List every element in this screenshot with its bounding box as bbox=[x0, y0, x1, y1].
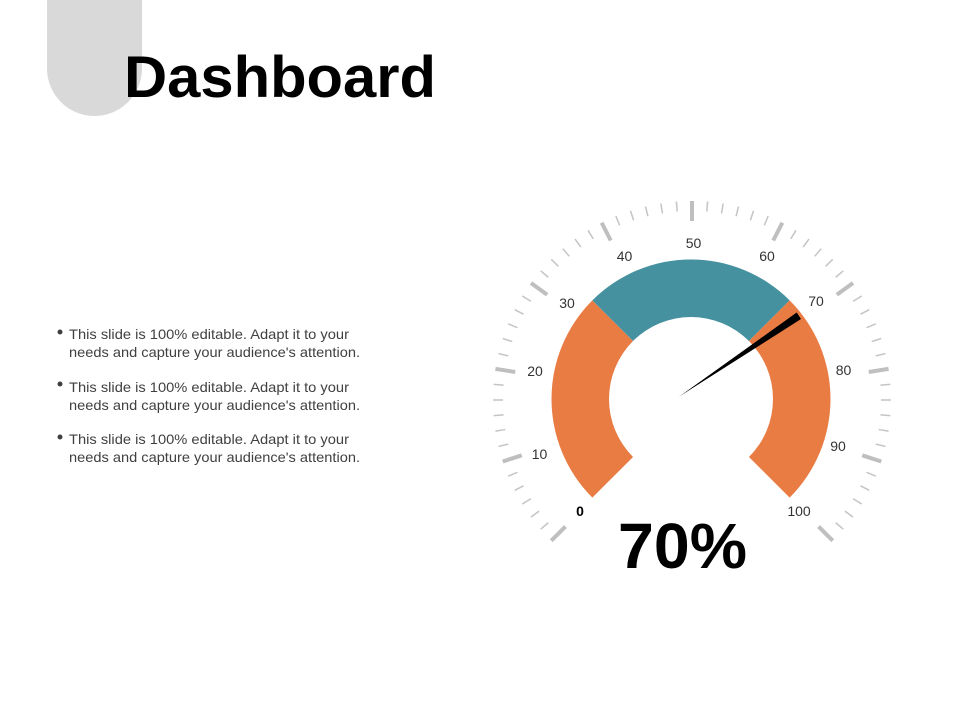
bullet list bbox=[58, 326, 360, 465]
bullet item 3: needs and capture your audience's attention. bbox=[69, 449, 360, 465]
gauge minor ticks bbox=[493, 202, 891, 529]
gauge value: 70% bbox=[618, 510, 747, 582]
bullet item 2 bbox=[58, 379, 360, 413]
scale labels: 90 bbox=[830, 438, 846, 454]
gauge left orange segment bbox=[552, 300, 633, 498]
scale labels: 60 bbox=[759, 248, 775, 264]
gauge bbox=[493, 201, 891, 582]
bullet item 1: needs and capture your audience's attention. bbox=[69, 344, 360, 360]
scale labels: 20 bbox=[527, 363, 543, 379]
scale labels: 30 bbox=[559, 295, 575, 311]
scale labels: 50 bbox=[686, 235, 701, 251]
scale labels: 80 bbox=[836, 362, 851, 378]
bullet item 1 bbox=[58, 326, 360, 360]
gauge right orange segment bbox=[749, 300, 830, 498]
scale labels: 70 bbox=[808, 293, 824, 309]
bullet item 3 bbox=[58, 431, 360, 465]
gauge needle bbox=[679, 312, 801, 396]
bullet item 1: This slide is 100% editable. Adapt it to your bbox=[69, 326, 349, 342]
decorative grey tab behind title bbox=[47, 0, 142, 116]
scale labels bbox=[527, 235, 851, 519]
scale labels: 40 bbox=[617, 248, 632, 264]
bullet item 2: This slide is 100% editable. Adapt it to your bbox=[69, 379, 349, 395]
gauge teal segment bbox=[592, 260, 790, 341]
scale labels: 10 bbox=[532, 446, 547, 462]
scale labels: 100 bbox=[787, 503, 811, 519]
gauge major ticks bbox=[495, 201, 889, 541]
scale labels: 0 bbox=[576, 503, 584, 519]
bullet item 2: needs and capture your audience's attention. bbox=[69, 397, 360, 413]
title: Dashboard bbox=[124, 45, 436, 110]
bullet item 3: This slide is 100% editable. Adapt it to your bbox=[69, 431, 349, 447]
